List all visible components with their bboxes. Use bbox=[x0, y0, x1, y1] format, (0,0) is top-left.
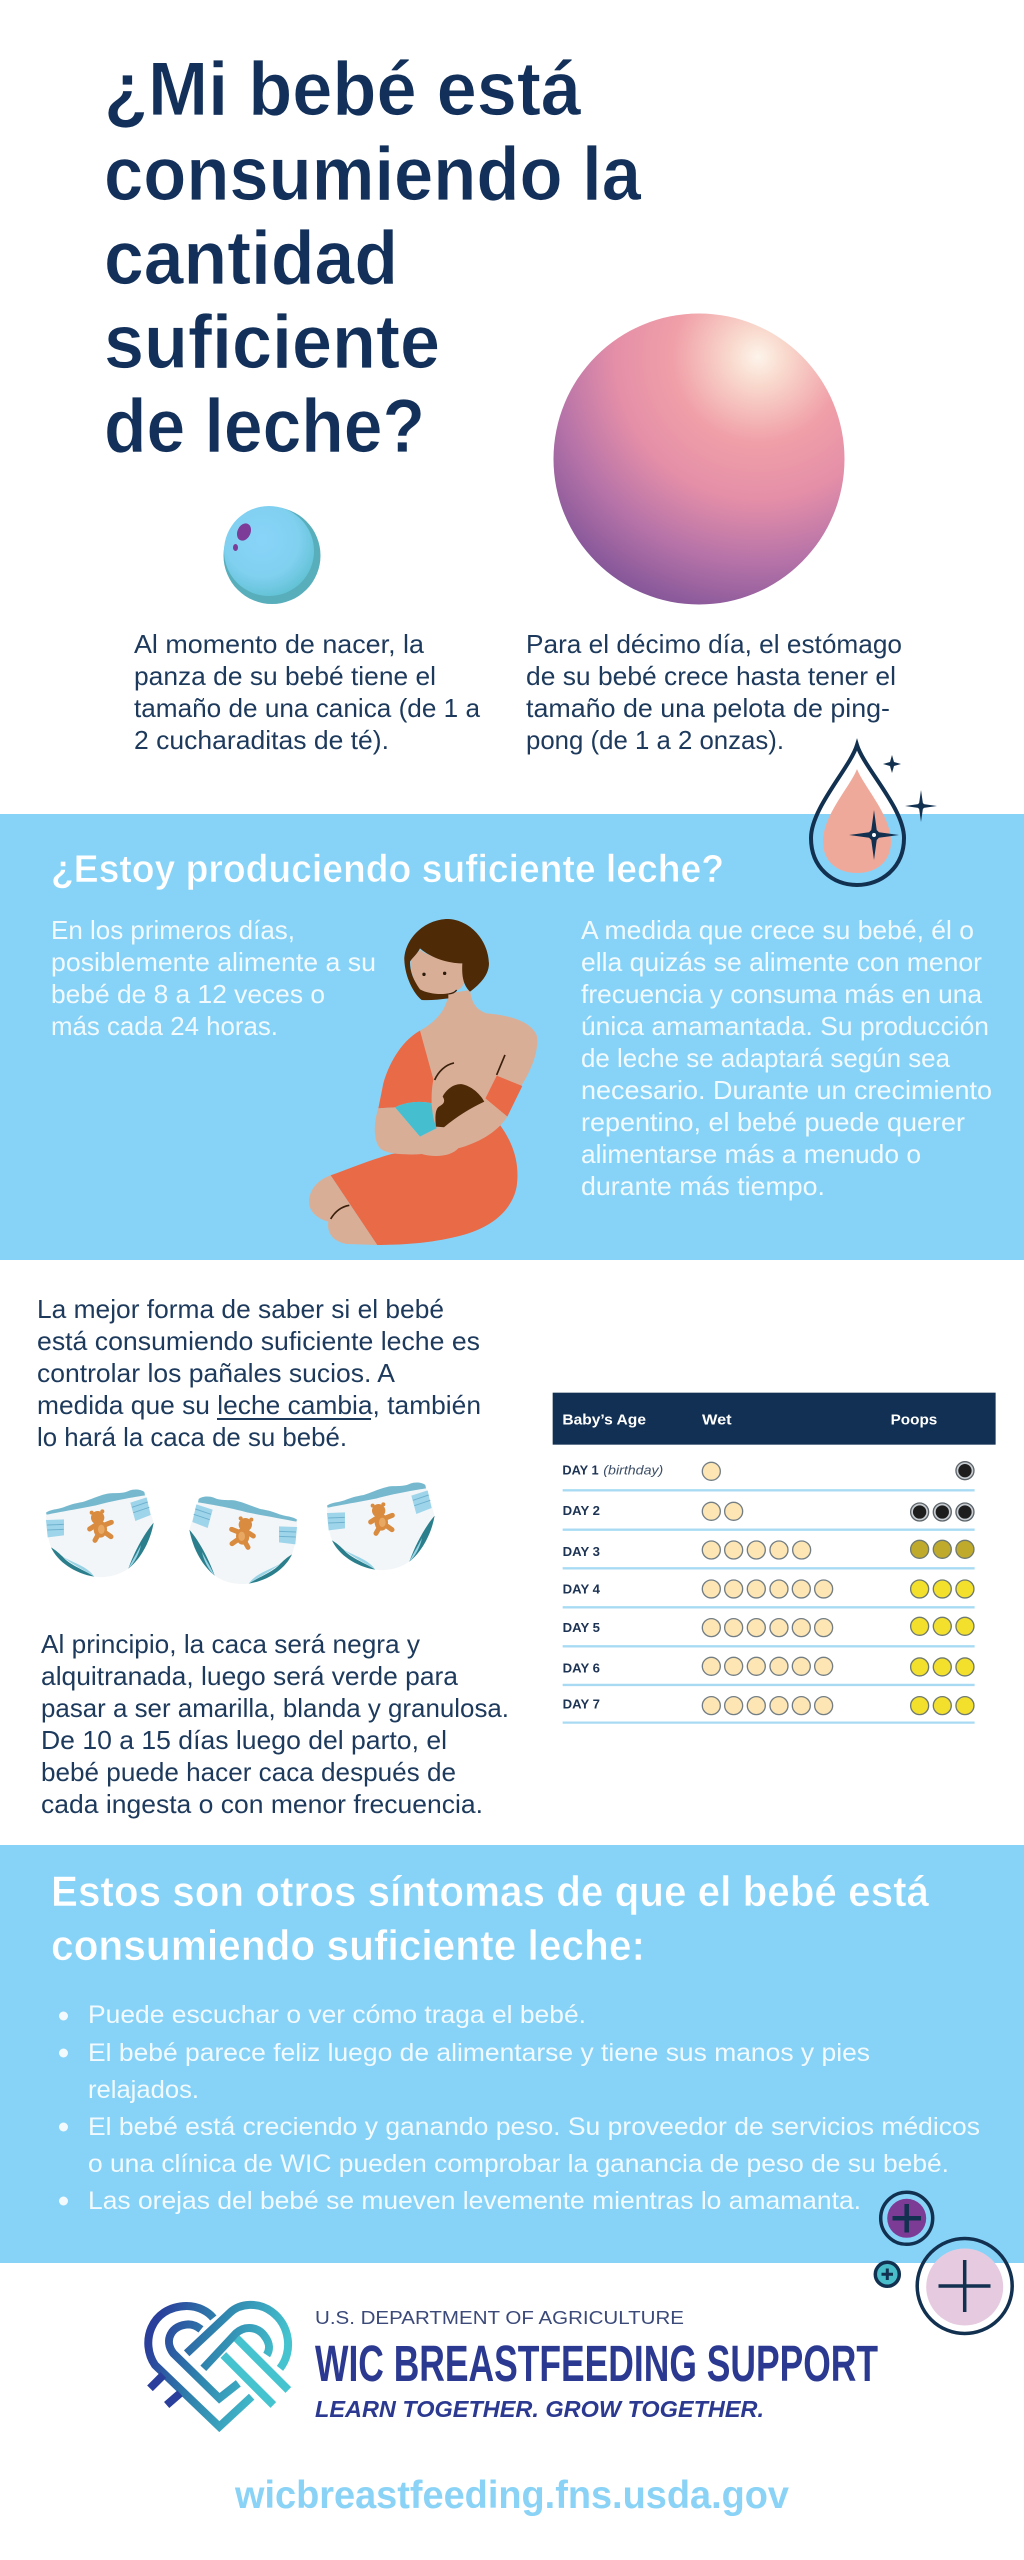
title: de leche? bbox=[104, 384, 425, 469]
text: first days feeding: bebé de 8 a 12 veces o bbox=[51, 979, 325, 1009]
text: first days feeding bbox=[51, 915, 376, 1041]
text: as the baby grows bbox=[581, 915, 992, 1201]
text: stomach size at day ten bbox=[526, 629, 902, 755]
table header: Wet bbox=[702, 1412, 732, 1428]
text: stomach size at birth: Al momento de nacer, la bbox=[134, 629, 425, 659]
icon: diaper one bbox=[46, 1490, 154, 1577]
text: as the baby grows: alimentarse más a menudo o bbox=[581, 1139, 921, 1169]
illustration: mother breastfeeding bbox=[309, 919, 537, 1245]
icon: milk drop with sparkles bbox=[811, 745, 937, 885]
text: as the baby grows: A medida que crece su bebé, él o bbox=[581, 915, 974, 945]
text: stomach size at day ten: pong (de 1 a 2 onzas). bbox=[526, 725, 784, 755]
title bbox=[104, 47, 642, 469]
icon: plus circles bbox=[875, 2192, 1012, 2334]
logo: WIC Breastfeeding Support wordmark bbox=[315, 2308, 878, 2422]
text: stomach size at birth: panza de su bebé tiene el bbox=[134, 661, 436, 691]
day labels bbox=[562, 1463, 663, 1712]
chart: wet and poop diapers by day bbox=[553, 1393, 996, 1723]
text: stool changes over time: cada ingesta o con menor frecuencia. bbox=[41, 1789, 483, 1819]
icon: diaper three bbox=[327, 1483, 435, 1570]
bullet list bbox=[59, 2001, 980, 2215]
title: cantidad bbox=[104, 216, 398, 301]
text: as the baby grows: repentino, el bebé puede querer bbox=[581, 1107, 965, 1137]
text: stool changes over time: bebé puede hacer caca después de bbox=[41, 1757, 456, 1787]
logo: WIC Breastfeeding Support wordmark: LEARN TOGETHER. GROW TOGETHER. bbox=[315, 2396, 764, 2422]
icon: diaper two bbox=[189, 1497, 297, 1584]
black poop dots bbox=[911, 1462, 974, 1521]
text: how to tell if baby gets enough: está consumiendo suficiente leche es bbox=[37, 1326, 480, 1356]
text: stomach size at day ten: tamaño de una pelota de ping- bbox=[526, 693, 890, 723]
text: stool changes over time bbox=[41, 1629, 509, 1819]
text: how to tell if baby gets enough bbox=[37, 1294, 481, 1452]
bullet list: Las orejas del bebé se mueven levemente mientras lo amamanta. bbox=[88, 2187, 861, 2215]
text: stool changes over time: alquitranada, luego será verde para bbox=[41, 1661, 459, 1691]
text: first days feeding: posiblemente alimente a su bbox=[51, 947, 376, 977]
day labels: (birthday) bbox=[603, 1463, 663, 1477]
text: stool changes over time: Al principio, la caca será negra y bbox=[41, 1629, 420, 1659]
title: suficiente bbox=[104, 300, 440, 385]
icon: ping-pong ball sized stomach bbox=[554, 314, 844, 604]
text: stomach size at birth bbox=[134, 629, 481, 755]
text: as the baby grows: de leche se adaptará según sea bbox=[581, 1043, 951, 1073]
bullet list: relajados. bbox=[88, 2076, 199, 2104]
text: how to tell if baby gets enough: La mejor forma de saber si el bebé bbox=[37, 1294, 444, 1324]
bullet list: Puede escuchar o ver cómo traga el bebé. bbox=[88, 2001, 586, 2029]
text: first days feeding: En los primeros días, bbox=[51, 915, 295, 945]
panel: other signs baby gets enough milk bbox=[0, 1845, 1024, 2263]
heading: other signs bbox=[51, 1868, 930, 1970]
text: stool changes over time: pasar a ser amarilla, blanda y granulosa. bbox=[41, 1693, 509, 1723]
text: stomach size at birth: tamaño de una canica (de 1 a bbox=[134, 693, 481, 723]
green poop dots bbox=[911, 1540, 974, 1558]
text: as the baby grows: necesario. Durante un crecimiento bbox=[581, 1075, 992, 1105]
day labels: DAY 2 bbox=[563, 1504, 600, 1518]
text: as the baby grows: ella quizás se alimente con menor bbox=[581, 947, 982, 977]
day labels: DAY 7 bbox=[563, 1698, 600, 1712]
table header: Baby’s Age bbox=[562, 1412, 646, 1428]
text: how to tell if baby gets enough: controlar los pañales sucios. A bbox=[37, 1358, 396, 1388]
text: stomach size at day ten: de su bebé crece hasta tener el bbox=[526, 661, 896, 691]
table header: Poops bbox=[891, 1412, 937, 1428]
panel: am I producing enough milk bbox=[0, 814, 1024, 1260]
logo: WIC heart mark bbox=[148, 2305, 288, 2427]
title: consumiendo la bbox=[104, 132, 642, 217]
day labels: DAY 1 bbox=[562, 1463, 599, 1477]
text: stool changes over time: De 10 a 15 días luego del parto, el bbox=[41, 1725, 447, 1755]
wet diaper dots bbox=[702, 1462, 833, 1715]
bullet list: El bebé parece feliz luego de alimentarse y tiene sus manos y pies bbox=[88, 2039, 870, 2067]
text: as the baby grows: única amamantada. Su producción bbox=[581, 1011, 989, 1041]
text: how to tell if baby gets enough: medida que su leche cambia, también bbox=[37, 1390, 481, 1420]
bullet list: El bebé está creciendo y ganando peso. Su proveedor de servicios médicos bbox=[88, 2113, 980, 2141]
text: stomach size at day ten: Para el décimo día, el estómago bbox=[526, 629, 902, 659]
text: how to tell if baby gets enough: lo hará la caca de su bebé. bbox=[37, 1422, 347, 1452]
text: as the baby grows: durante más tiempo. bbox=[581, 1171, 825, 1201]
yellow poop dots bbox=[911, 1580, 974, 1715]
title: ¿Mi bebé está bbox=[104, 47, 582, 132]
text: first days feeding: más cada 24 horas. bbox=[51, 1011, 278, 1041]
heading: other signs: consumiendo suficiente leche: bbox=[51, 1922, 645, 1970]
icon: marble sized stomach bbox=[224, 506, 320, 604]
day labels: DAY 6 bbox=[563, 1661, 600, 1675]
logo: WIC Breastfeeding Support wordmark: U.S. DEPARTMENT OF AGRICULTURE bbox=[315, 2308, 684, 2328]
table header bbox=[553, 1393, 996, 1445]
heading: producing enough: ¿Estoy produciendo suficiente leche? bbox=[51, 848, 724, 891]
website url: wicbreastfeeding.fns.usda.gov bbox=[234, 2474, 789, 2517]
day labels: DAY 3 bbox=[563, 1545, 600, 1559]
day labels: DAY 5 bbox=[563, 1621, 600, 1635]
heading: other signs: Estos son otros síntomas de que el bebé está bbox=[51, 1868, 930, 1916]
bullet list: o una clínica de WIC pueden comprobar la ganancia de peso de su bebé. bbox=[88, 2150, 949, 2178]
text: stomach size at birth: 2 cucharaditas de té). bbox=[134, 725, 389, 755]
text: as the baby grows: frecuencia y consuma más en una bbox=[581, 979, 983, 1009]
day labels: DAY 4 bbox=[563, 1582, 600, 1596]
